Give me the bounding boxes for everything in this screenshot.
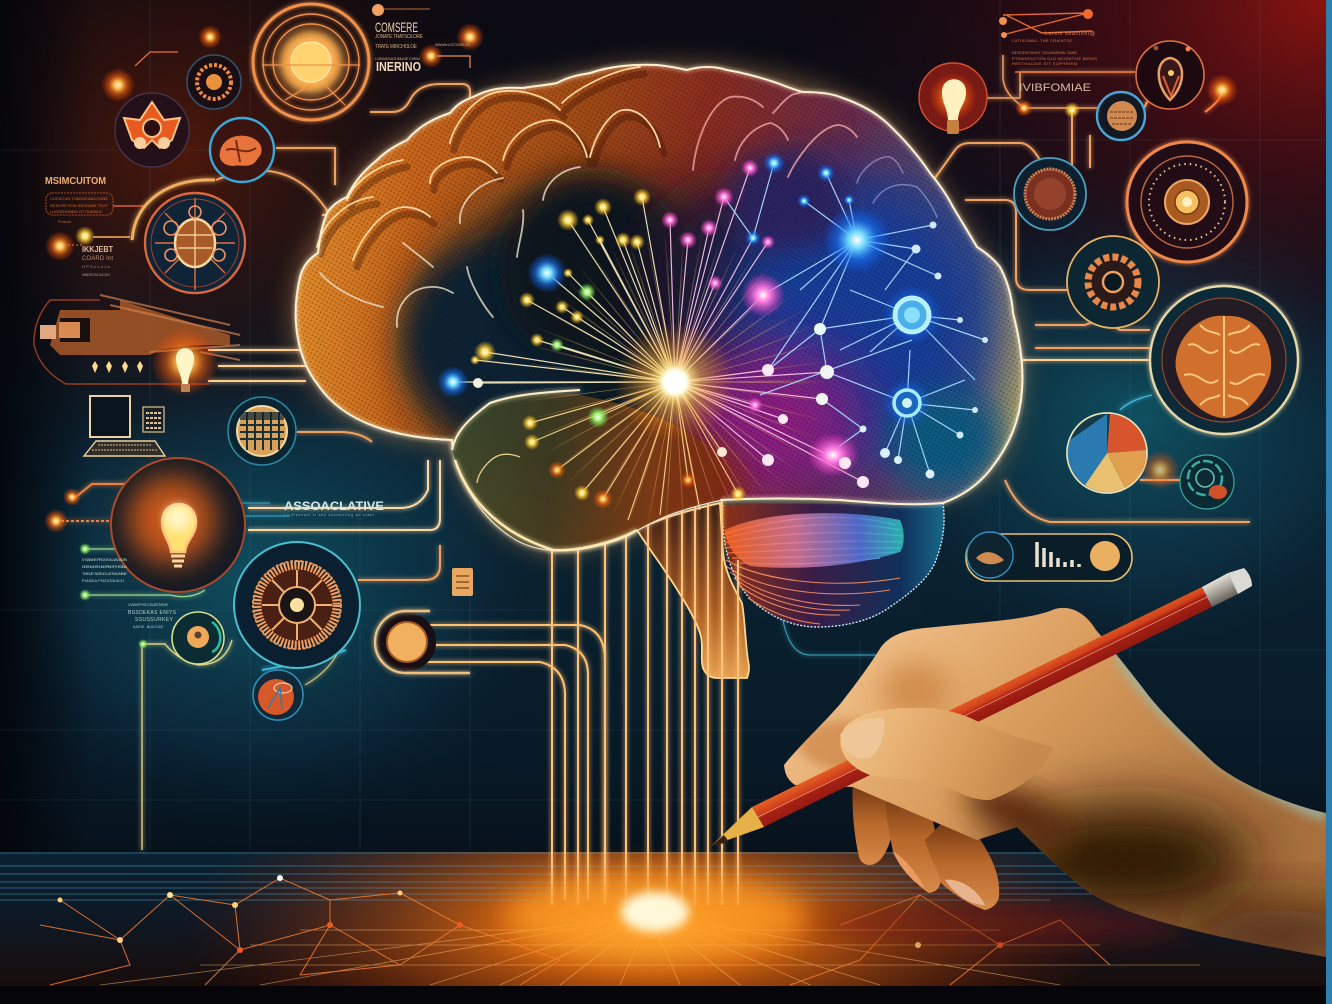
neural network rays [453,163,985,520]
connector dots left [44,488,148,649]
floor light burst [505,873,805,957]
heading: COMSERE: TRATE WIRCHOLOE [375,44,418,50]
text block lower left: TNEUE SATIUCLATRAUNINE [82,571,127,576]
brain cerebrum [280,50,1040,560]
heading: COMSERE: LORAIN MOHNLINE CHEM [375,56,420,61]
brain glow [296,67,1019,550]
text block left: CUDSCUN THANSCANCOUNE [50,196,108,201]
text block left: COARD Int [82,256,113,262]
brainstem [637,503,749,678]
icon: tree-ring wheel [234,542,360,668]
panel: bar stats [966,532,1132,581]
icon: light bulb small [151,328,219,396]
icon: map pin [1136,41,1204,109]
neural nodes [437,152,988,509]
text block lower left: E SAIANS PRONT ALAAGADIN [82,557,127,562]
icon: note [452,568,473,596]
icon: orange disc [253,670,303,720]
icon: orange brain in blue ring [210,118,274,182]
icon: spiral [1180,455,1234,509]
icon: lotus [115,93,189,167]
cerebellum [723,503,944,627]
glow dot by pie [1140,450,1180,490]
brain outline [296,65,1023,550]
text block left: HPSncous [82,264,110,269]
icon: target sun ring [253,4,369,120]
top connector dots [101,4,484,102]
heading: ASSOACLATIVE: Lo discount tr seu accounting ad stant [284,513,374,517]
icon: gear ring [1067,236,1159,328]
icon: concentric target [1127,142,1247,262]
text block left: Proscrai [58,220,71,224]
connector dots right [1015,74,1238,118]
thumb over pencil [840,708,1054,800]
text block top right: DESSENTASHT SOUNDRAW JUNE [1012,50,1077,55]
hand [784,608,1332,963]
text block top right: LUTISONALL THE CRAINTSE [1012,38,1072,43]
gyri folds [317,67,937,327]
text block top right [999,9,1135,72]
circuit lines right [780,55,1250,655]
text block left: LUGSEHONEM OT RUEWLE [50,209,102,214]
heading: COMSERE: COMSERE [375,19,418,35]
text block left: DESCRETION INCDUME TEXT [50,203,109,208]
circuit lines left [56,84,605,900]
text block lower left: SSUSSURKEY [135,617,174,623]
temporal lobe [452,390,723,550]
icon: textured orb [1014,158,1086,230]
icon: teal grid circle [228,397,296,465]
icon: blue ring texture [1097,92,1145,140]
icon: small mandala [187,55,241,109]
icon: sun disc pill [375,611,470,673]
text block top right: Lorem soactoni@ [1045,31,1095,37]
heading: MSIMCUITOM: MSIMCUITOM [45,176,106,187]
panel: machine illustration [34,295,240,384]
text block lower left: CWW.PYSCI SUSTIVIVE [128,602,168,607]
text block left: MBDESSOLICEN [82,272,110,277]
pie chart [1067,413,1147,493]
heading: ASSOACLATIVE: ASSOACLATIVE [284,499,384,513]
text block top right: HEETHACDIE SIT SOPHRIEM [1012,61,1077,66]
icon: radial brain medallion [132,180,245,293]
icon: brain medallion [1150,286,1298,434]
text block lower left: PIANDA PIATIONIACH [82,578,124,583]
vertical signal lines [552,500,738,905]
text block left [45,193,145,277]
text block left: IKKJEBT [82,245,113,254]
heading: COMSERE [375,19,424,61]
heading: IVIBFOMIAE: IVIBFOMIAE [1019,82,1091,94]
icon: light bulb medallion [111,458,245,592]
pencil [711,568,1252,846]
icon: small eye circle [172,612,224,664]
text block lower left: AAEIE. BUILDSE [133,625,164,629]
top connector dots: WWWW.LOCOCKELOO [435,43,470,47]
text block lower left [82,557,177,629]
icon: computer [84,396,165,456]
heading: COMSERE: JONATE TRATSOLORE [375,34,424,40]
text block lower left: BSSDEKAS ENIYS [128,610,177,616]
icon: bulb red disc [919,63,987,134]
fingers [852,780,999,910]
heading: INERINO: INERINO [376,60,421,74]
interior shading [405,150,1000,530]
palm [784,608,1326,957]
text block lower left: DNENUNTE UNDPINOFTHATINA [82,564,127,569]
text block top right: PTENHEDOTION OLD MCGNITIVE BERAS [1012,56,1097,61]
